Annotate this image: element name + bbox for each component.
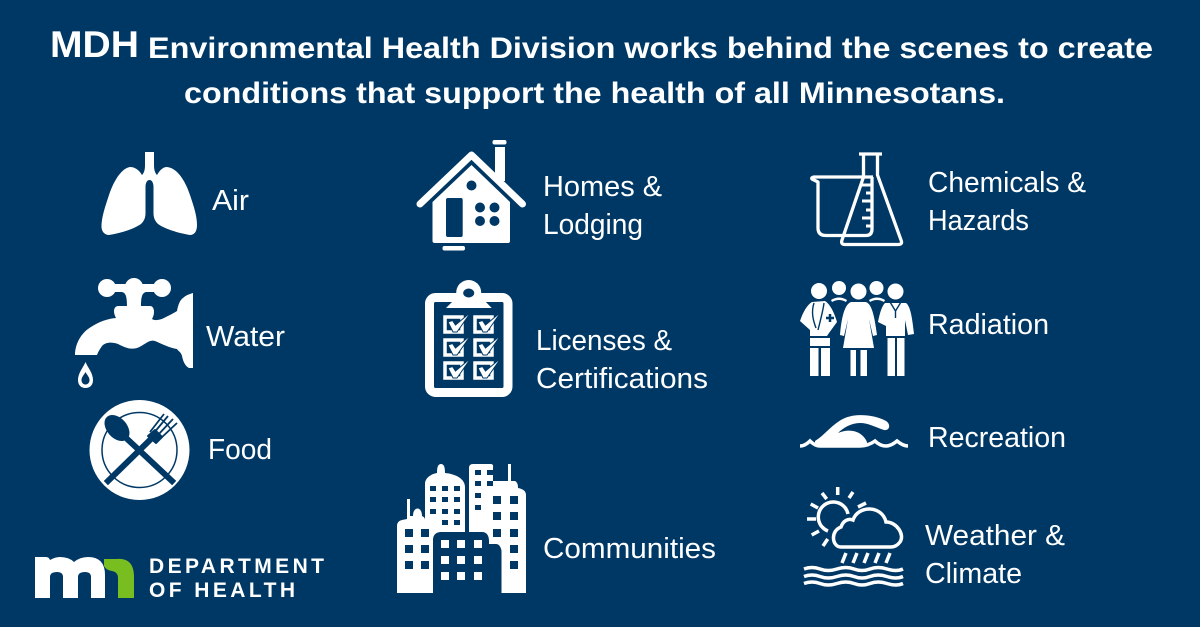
icon: beaker and flask — [812, 154, 902, 244]
title: MDH — [50, 24, 139, 65]
label: Weather & Climate — [925, 520, 1065, 590]
label: Licenses & Certifications: Licenses & — [536, 325, 672, 357]
title — [50, 24, 1153, 110]
label: Weather & Climate: Climate — [925, 558, 1022, 590]
icon: city buildings — [397, 464, 526, 593]
label: Licenses & Certifications — [536, 325, 708, 395]
title: conditions that support the health of all Minnesotans. — [184, 77, 1005, 110]
label: Homes & Lodging: Lodging — [543, 209, 643, 241]
label: Recreation: Recreation — [928, 422, 1066, 454]
label: Chemicals & Hazards: Hazards — [928, 205, 1029, 237]
title: Environmental Health Division works behind the scenes to create — [148, 32, 1153, 65]
label: Chemicals & Hazards — [928, 167, 1086, 237]
label: Weather & Climate: Weather & — [925, 520, 1065, 552]
icon: water faucet — [75, 278, 193, 388]
icon: group of people — [800, 281, 914, 376]
label: Air: Air — [212, 185, 250, 217]
label: Chemicals & Hazards: Chemicals & — [928, 167, 1086, 199]
icon: swimmer — [800, 415, 908, 446]
label: Homes & Lodging: Homes & — [543, 171, 662, 203]
icon: lungs — [101, 152, 197, 235]
label: Communities: Communities — [543, 533, 716, 565]
icon: clipboard checklist — [430, 280, 508, 392]
label: Radiation: Radiation — [928, 309, 1049, 341]
icon: house — [420, 140, 522, 250]
logo: MN Department of Health: DEPARTMENT — [149, 555, 324, 578]
label: Food: Food — [208, 434, 272, 466]
logo: MN Department of Health: OF HEALTH — [149, 579, 295, 602]
label: Licenses & Certifications: Certifications — [536, 363, 708, 395]
label: Homes & Lodging — [543, 171, 662, 241]
icon: plate with fork and spoon — [90, 400, 190, 500]
logo: MN Department of Health — [35, 555, 324, 602]
label: Water: Water — [206, 321, 286, 353]
icon: weather — [804, 487, 903, 585]
